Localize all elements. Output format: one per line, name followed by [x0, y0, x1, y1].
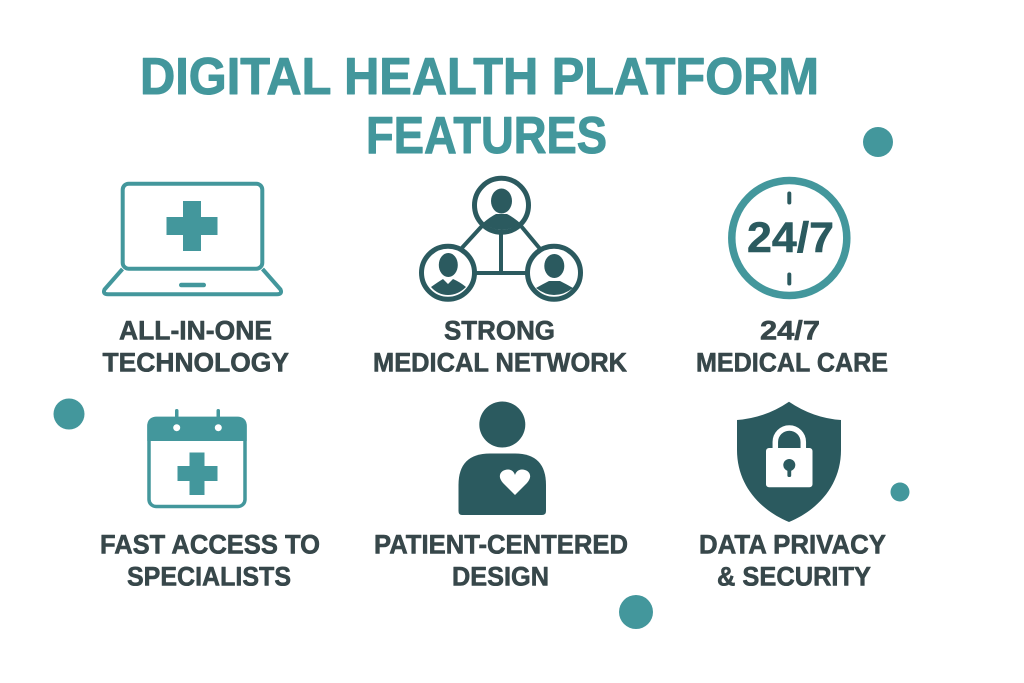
icon: patient with heart [458, 402, 546, 515]
title: FEATURES [366, 107, 607, 165]
label: 24/7 medical care: MEDICAL CARE [696, 348, 888, 378]
icon: shield with padlock [737, 402, 841, 522]
decorative dot left [54, 398, 84, 430]
decorative dot bottom [619, 595, 653, 629]
label: data privacy and security: DATA PRIVACY [699, 530, 886, 560]
label: strong medical network: MEDICAL NETWORK [373, 348, 627, 378]
label: all-in-one technology: TECHNOLOGY [102, 348, 289, 378]
icon: medical network [422, 178, 580, 299]
icon: 24/7 clock: 24/7 [747, 214, 834, 262]
label: fast access to specialists: FAST ACCESS TO [100, 530, 320, 560]
label: strong medical network: STRONG [444, 316, 555, 346]
label: patient-centered design [374, 530, 628, 592]
label: data privacy and security [699, 530, 886, 592]
label: patient-centered design: DESIGN [452, 562, 549, 592]
title [140, 48, 819, 165]
label: patient-centered design: PATIENT-CENTERED [374, 530, 628, 560]
decorative dot top right [863, 127, 893, 157]
label: all-in-one technology: ALL-IN-ONE [119, 316, 272, 346]
label: all-in-one technology [102, 316, 289, 378]
label: strong medical network [373, 316, 627, 378]
decorative dot right [890, 482, 910, 502]
icon: 24/7 clock [732, 180, 847, 296]
label: 24/7 medical care [696, 316, 888, 378]
title: DIGITAL HEALTH PLATFORM [140, 48, 819, 106]
label: fast access to specialists: SPECIALISTS [127, 562, 291, 592]
label: fast access to specialists [100, 530, 320, 592]
label: 24/7 medical care: 24/7 [760, 316, 820, 346]
icon: calendar with cross [147, 409, 247, 506]
icon: laptop with medical cross [104, 184, 281, 294]
label: data privacy and security: & SECURITY [717, 562, 871, 592]
